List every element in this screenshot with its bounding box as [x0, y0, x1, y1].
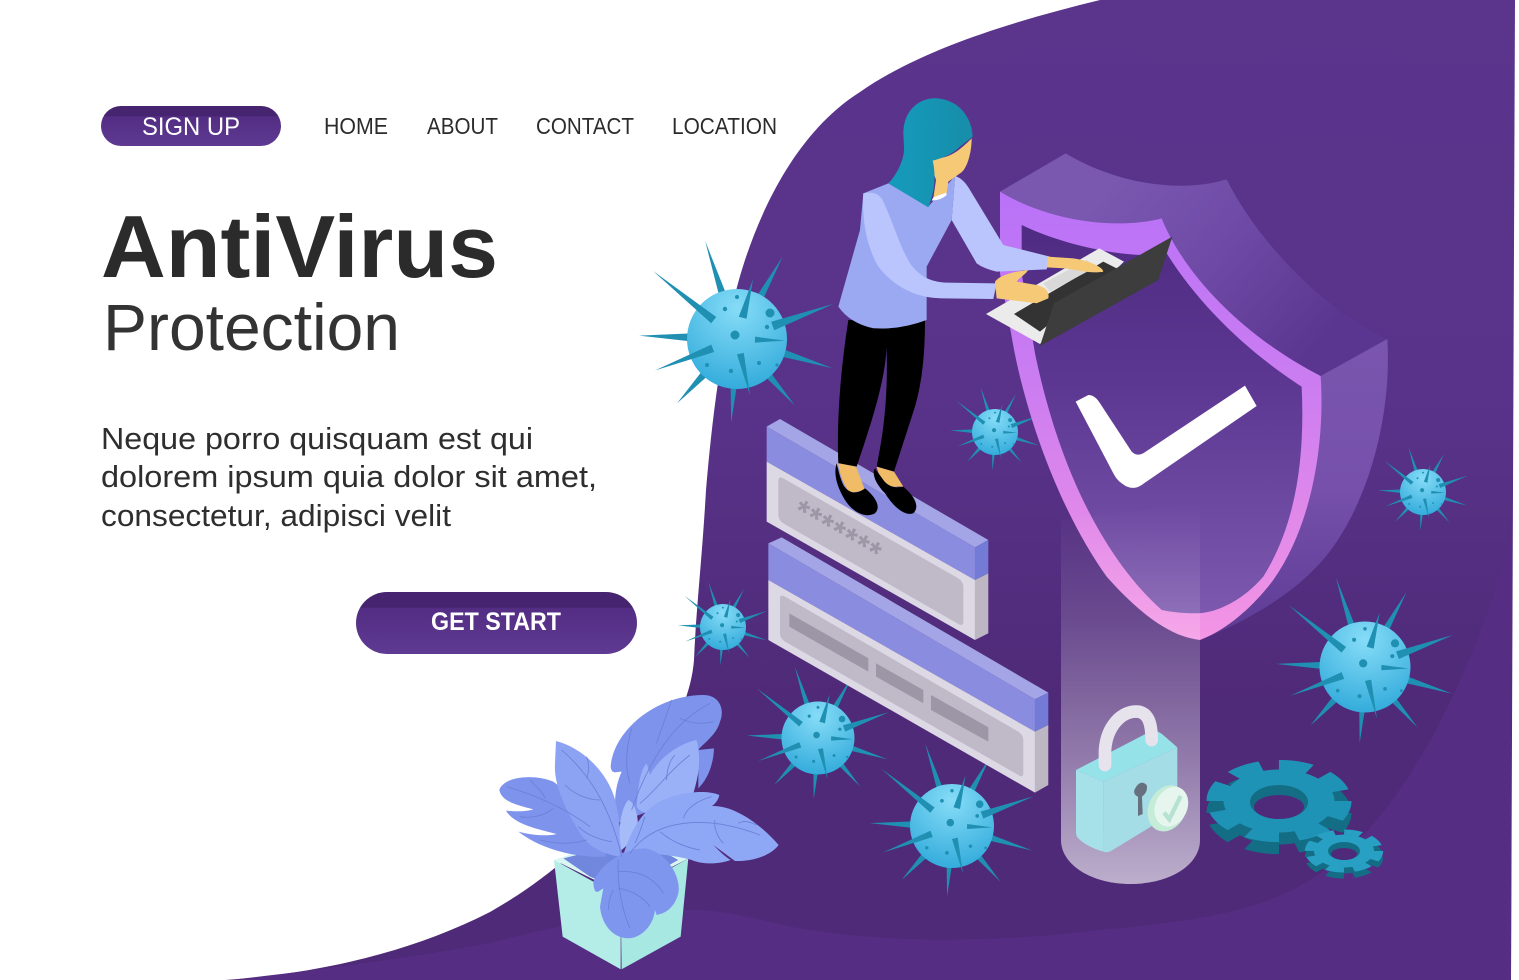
lock check badge — [1140, 779, 1195, 838]
shield side face — [1200, 339, 1388, 640]
large gear — [1215, 777, 1343, 849]
far arm sleeve — [952, 176, 1050, 272]
body paragraph — [101, 421, 597, 533]
leaf right — [623, 792, 779, 863]
leaf bottom — [593, 848, 679, 938]
shield top band — [1000, 153, 1387, 376]
body paragraph: dolorem ipsum quia dolor sit amet, — [101, 459, 597, 494]
legs — [838, 320, 925, 472]
panel: password field: ******* — [787, 492, 889, 572]
subtitle: Protection — [103, 290, 400, 364]
hair — [888, 98, 973, 207]
small gear — [1310, 838, 1378, 876]
navigation menu: ABOUT — [427, 113, 498, 139]
keyhole — [1134, 783, 1147, 816]
leaf top back — [698, 748, 714, 788]
navigation menu: LOCATION — [672, 113, 777, 139]
panel: code field — [768, 537, 1048, 793]
gears — [1215, 765, 1378, 876]
navigation menu — [324, 113, 777, 139]
virus below panels left — [746, 666, 890, 799]
check mark — [1076, 386, 1257, 488]
shield — [1000, 153, 1388, 640]
body paragraph: consectetur, adipisci velit — [101, 498, 451, 533]
navigation menu: CONTACT — [536, 113, 634, 139]
laptop — [986, 237, 1172, 346]
leaf top front — [637, 740, 699, 813]
leaf center small — [620, 800, 638, 850]
collar — [932, 193, 947, 201]
leaf left back — [499, 777, 607, 857]
virus large upper left — [639, 240, 835, 423]
navigation menu: HOME — [324, 113, 388, 139]
title: AntiVirus — [101, 197, 498, 296]
sign up button: SIGN UP — [142, 113, 240, 141]
lock shackle — [1105, 712, 1152, 765]
plant in pot — [499, 695, 779, 969]
virus far right small — [1378, 446, 1468, 531]
virus beside person — [950, 386, 1040, 471]
sign up button — [101, 106, 281, 146]
lock body — [1076, 731, 1177, 782]
torso — [838, 176, 955, 329]
leaf veins — [507, 700, 760, 928]
get start button — [356, 592, 637, 654]
neck and face — [932, 138, 972, 198]
body paragraph: Neque porro quisquam est qui — [101, 421, 533, 456]
virus left small — [678, 581, 768, 666]
get start button: GET START — [431, 608, 561, 636]
shield rim — [1000, 192, 1321, 640]
virus right large — [1276, 577, 1454, 743]
person at laptop — [835, 98, 1172, 515]
near arm sleeve — [863, 193, 997, 299]
lower background wave — [230, 520, 1512, 980]
panel: password field — [767, 419, 988, 640]
pot — [554, 852, 688, 969]
light beam cylinder — [1061, 503, 1200, 884]
padlock — [1076, 712, 1195, 852]
login panels — [767, 419, 1048, 793]
shoes — [835, 463, 916, 515]
leaf left upper — [555, 741, 622, 857]
hands — [995, 257, 1103, 303]
shield inner face — [1022, 225, 1302, 613]
virus below panels right — [870, 743, 1035, 897]
